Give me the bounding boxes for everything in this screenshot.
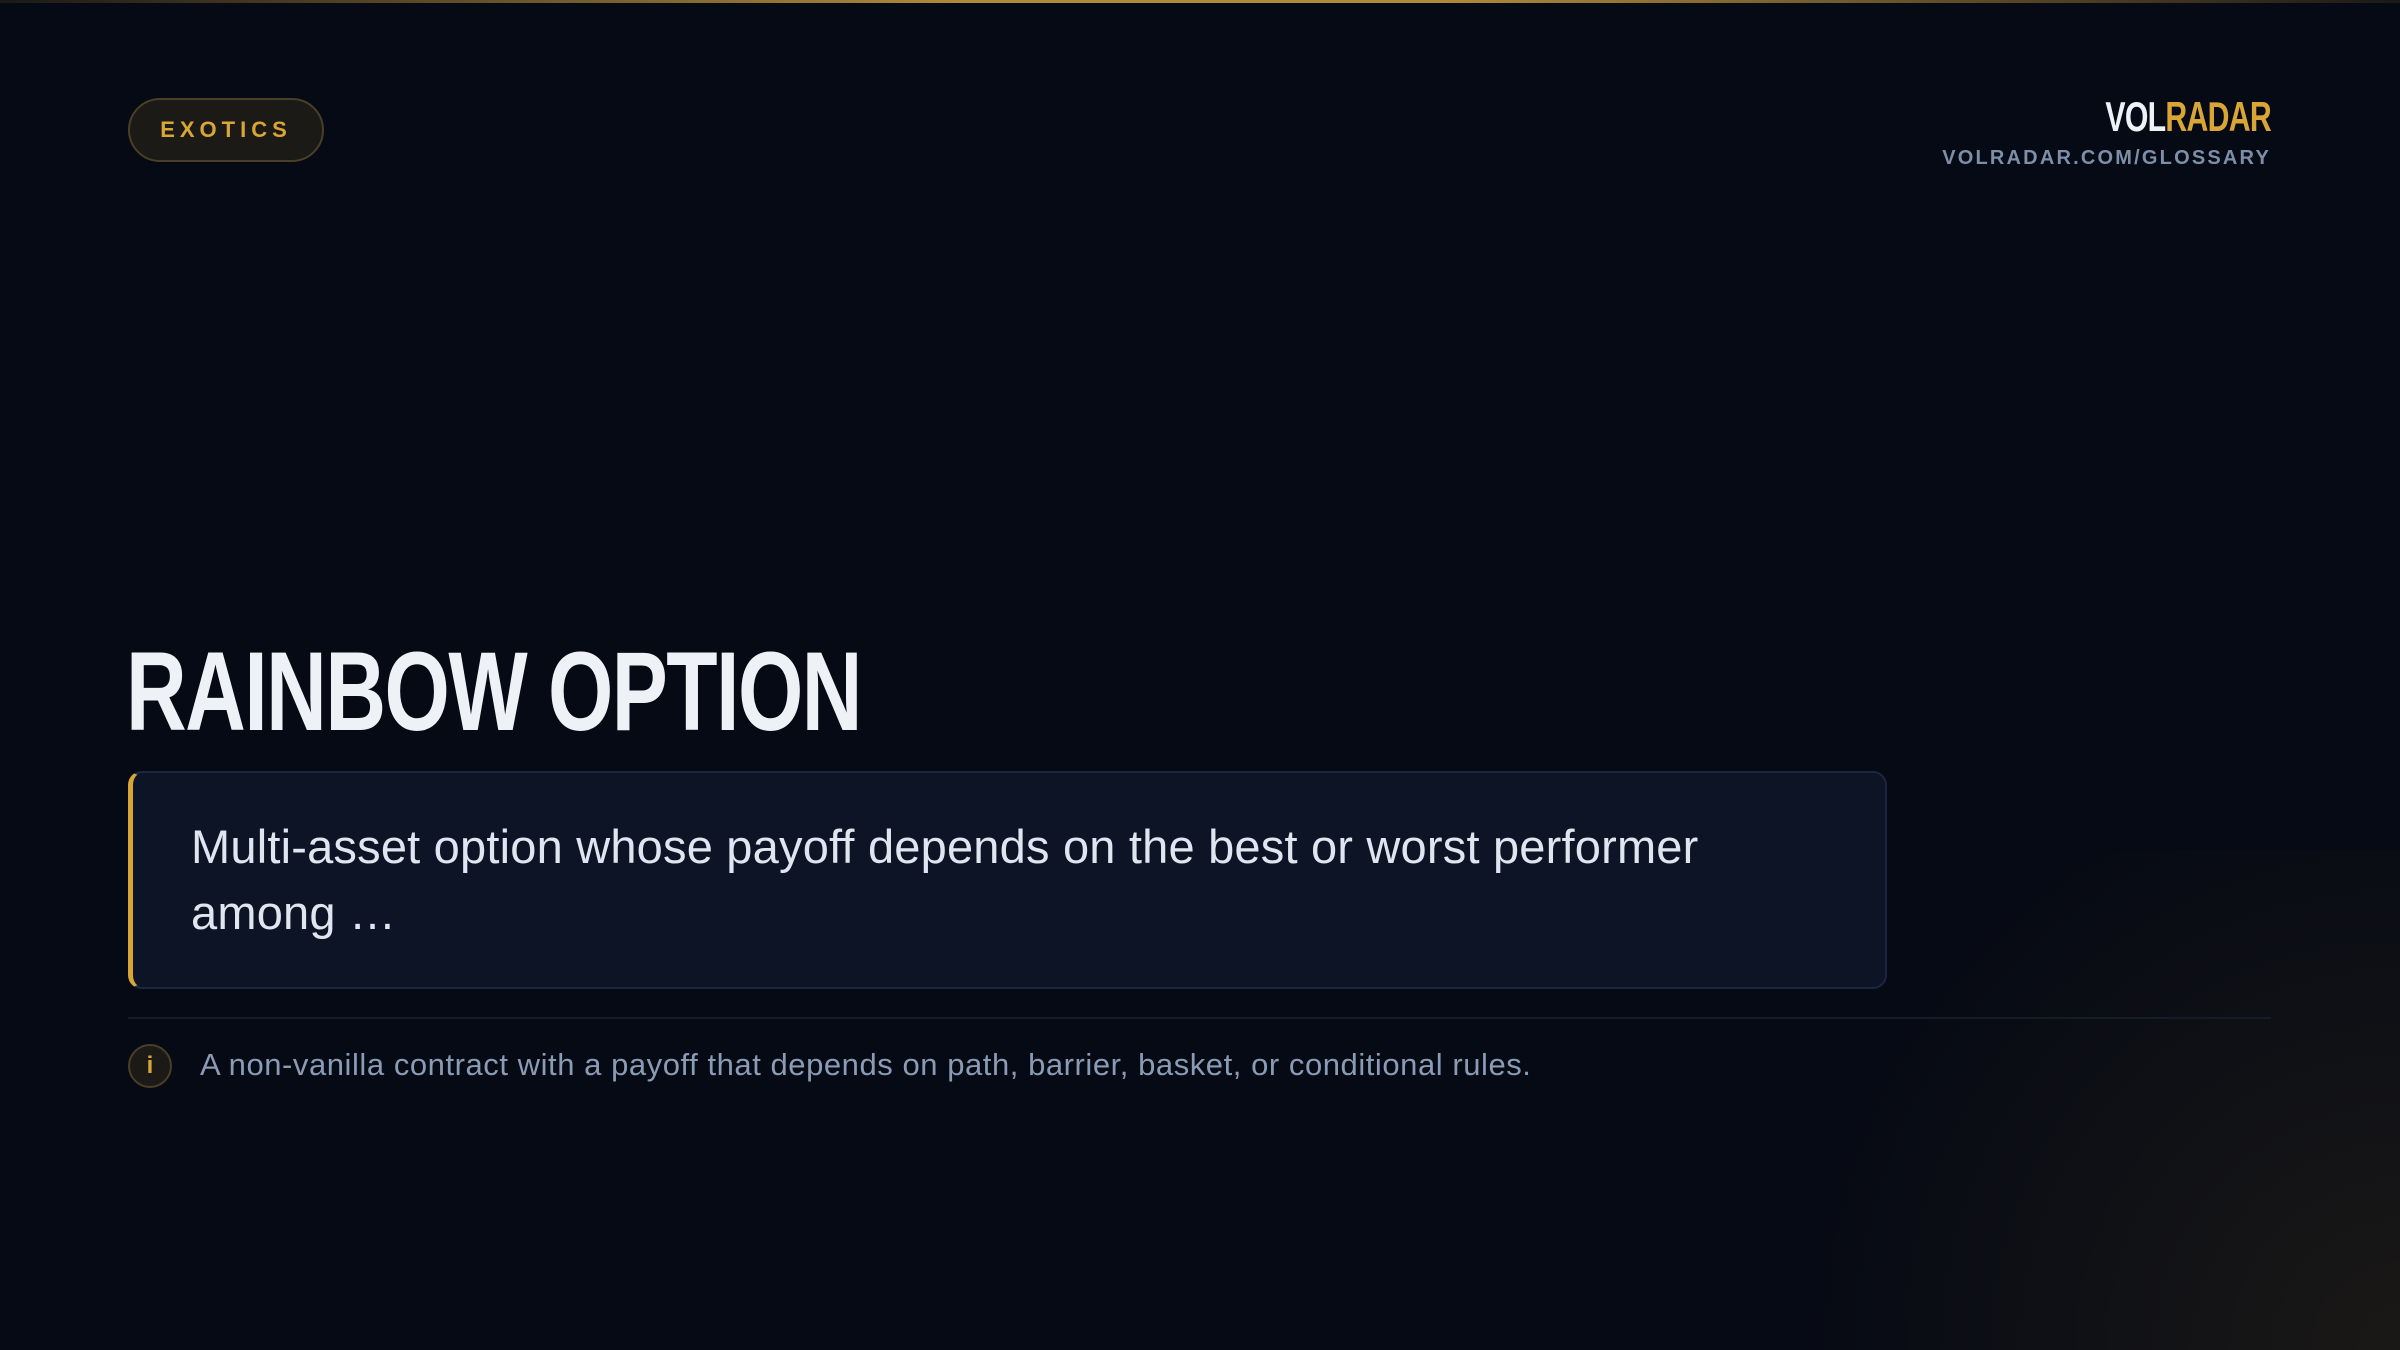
icon: info: i [147, 1052, 153, 1079]
tag pill: exotics [128, 98, 324, 162]
definition box [128, 771, 1887, 989]
title: RAINBOW OPTION [126, 629, 861, 754]
icon: info [128, 1044, 172, 1088]
footnote text: A non-vanilla contract with a payoff that depends on path, barrier, basket, or conditional rules. [200, 1047, 1531, 1082]
brand url: VOLRADAR.COM/GLOSSARY [1942, 147, 2271, 169]
tag pill: exotics: EXOTICS [160, 117, 292, 142]
brand logo: VOLRADAR [2105, 93, 2271, 140]
definition text: Multi-asset option whose payoff depends on the best or worst performer among … [191, 820, 1698, 939]
